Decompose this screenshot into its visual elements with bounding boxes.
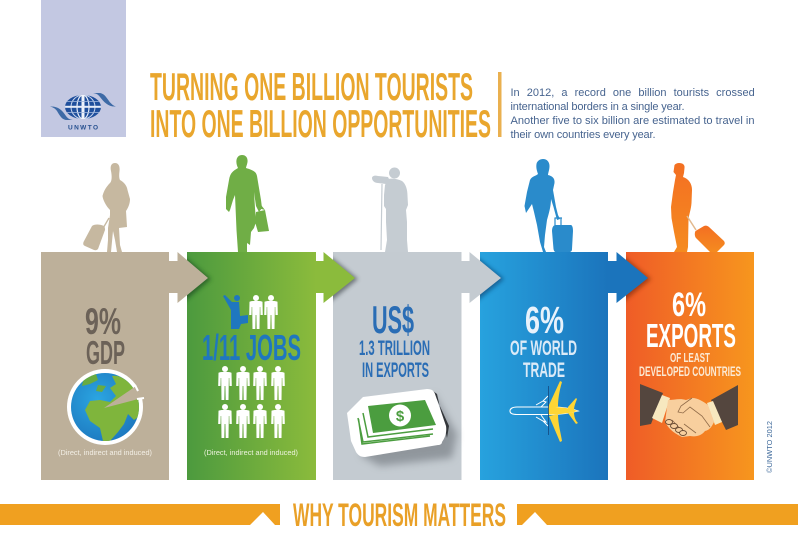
label: 1.3 trillion in exports bbox=[359, 337, 430, 382]
silhouette: businessman, green bbox=[226, 155, 269, 252]
stat: 1/11 jobs: 1/11 JOBS bbox=[202, 327, 301, 368]
intro paragraph: their own countries every year. bbox=[510, 129, 656, 141]
arrow shadow on next panel bbox=[480, 256, 505, 302]
caption: (Direct, indirect and induced) bbox=[58, 448, 152, 457]
title divider bbox=[498, 72, 502, 137]
panel body and arrow bbox=[480, 252, 648, 480]
intro paragraph: international borders in a single year. bbox=[510, 101, 684, 113]
label: 1.3 trillion in exports: 1.3 TRILLION bbox=[359, 337, 430, 360]
pie slice wedge bbox=[104, 384, 146, 408]
panel: 6% of world trade bbox=[480, 159, 651, 480]
panel body and arrow bbox=[333, 252, 501, 480]
stat: US$: US$ bbox=[372, 299, 414, 342]
panel body and arrow bbox=[187, 252, 355, 480]
icon: airplane bbox=[510, 381, 578, 442]
label: of world trade: OF WORLD bbox=[510, 337, 577, 360]
stat: 6%: 6% bbox=[672, 286, 706, 324]
label: of world trade: TRADE bbox=[523, 359, 565, 382]
silhouette: woman with suitcase, tan bbox=[83, 163, 130, 252]
icon: banknotes: $ bbox=[396, 408, 405, 425]
silhouette: woman with suitcase, blue bbox=[524, 159, 573, 252]
label: of least developed countries: OF LEAST bbox=[670, 350, 710, 365]
intro paragraph bbox=[510, 87, 755, 141]
intro paragraph: In 2012, a record one billion tourists crossed bbox=[510, 87, 755, 99]
caption: (Direct, indirect and induced) bbox=[204, 448, 298, 457]
stat: 9%: 9% bbox=[85, 301, 121, 342]
title bbox=[150, 66, 491, 146]
icon: banknotes bbox=[347, 389, 457, 466]
label: 1.3 trillion in exports: IN EXPORTS bbox=[362, 359, 429, 382]
panel: US$ 1.3 trillion in exports bbox=[333, 168, 504, 480]
copyright note: ©UNWTO 2012 bbox=[765, 421, 774, 473]
footer band: left bbox=[0, 504, 280, 525]
icon: blue worker with briefcase bbox=[223, 295, 248, 329]
icons: white figures rows bbox=[218, 366, 285, 438]
arrow shadow on next panel bbox=[626, 256, 652, 302]
chart: globe with 9% slice bbox=[67, 369, 146, 445]
icons: two white figures top row bbox=[249, 295, 278, 329]
stat: GDP: GDP bbox=[86, 334, 125, 371]
label: of world trade bbox=[510, 337, 577, 382]
logo wordmark: UNWTO bbox=[68, 124, 98, 132]
footer title: WHY TOURISM MATTERS bbox=[293, 497, 506, 533]
icon: handshake bbox=[640, 384, 738, 437]
panel: 9% GDP bbox=[41, 163, 211, 480]
panel body and arrow bbox=[41, 252, 208, 480]
intro paragraph: Another five to six billion are estimated to travel in bbox=[510, 115, 754, 127]
arrow shadow on next panel bbox=[333, 255, 360, 303]
arrow shadow on next panel bbox=[187, 256, 212, 302]
logo globe bbox=[64, 95, 102, 119]
footer band: right bbox=[517, 504, 798, 525]
stat: 6%: 6% bbox=[525, 300, 564, 342]
panel: 1/11 jobs bbox=[187, 155, 358, 480]
silhouette: man with suitcase, orange bbox=[671, 163, 725, 252]
logo panel: UNWTO bbox=[41, 0, 126, 137]
panel: 6% exports of least developed countries bbox=[626, 163, 754, 480]
silhouette: photographer with tripod, grey bbox=[372, 168, 408, 252]
logo swooshes bbox=[50, 93, 116, 120]
title: TURNING ONE BILLION TOURISTS bbox=[150, 66, 473, 109]
panel body bbox=[626, 252, 754, 480]
label: of least developed countries bbox=[639, 350, 741, 379]
